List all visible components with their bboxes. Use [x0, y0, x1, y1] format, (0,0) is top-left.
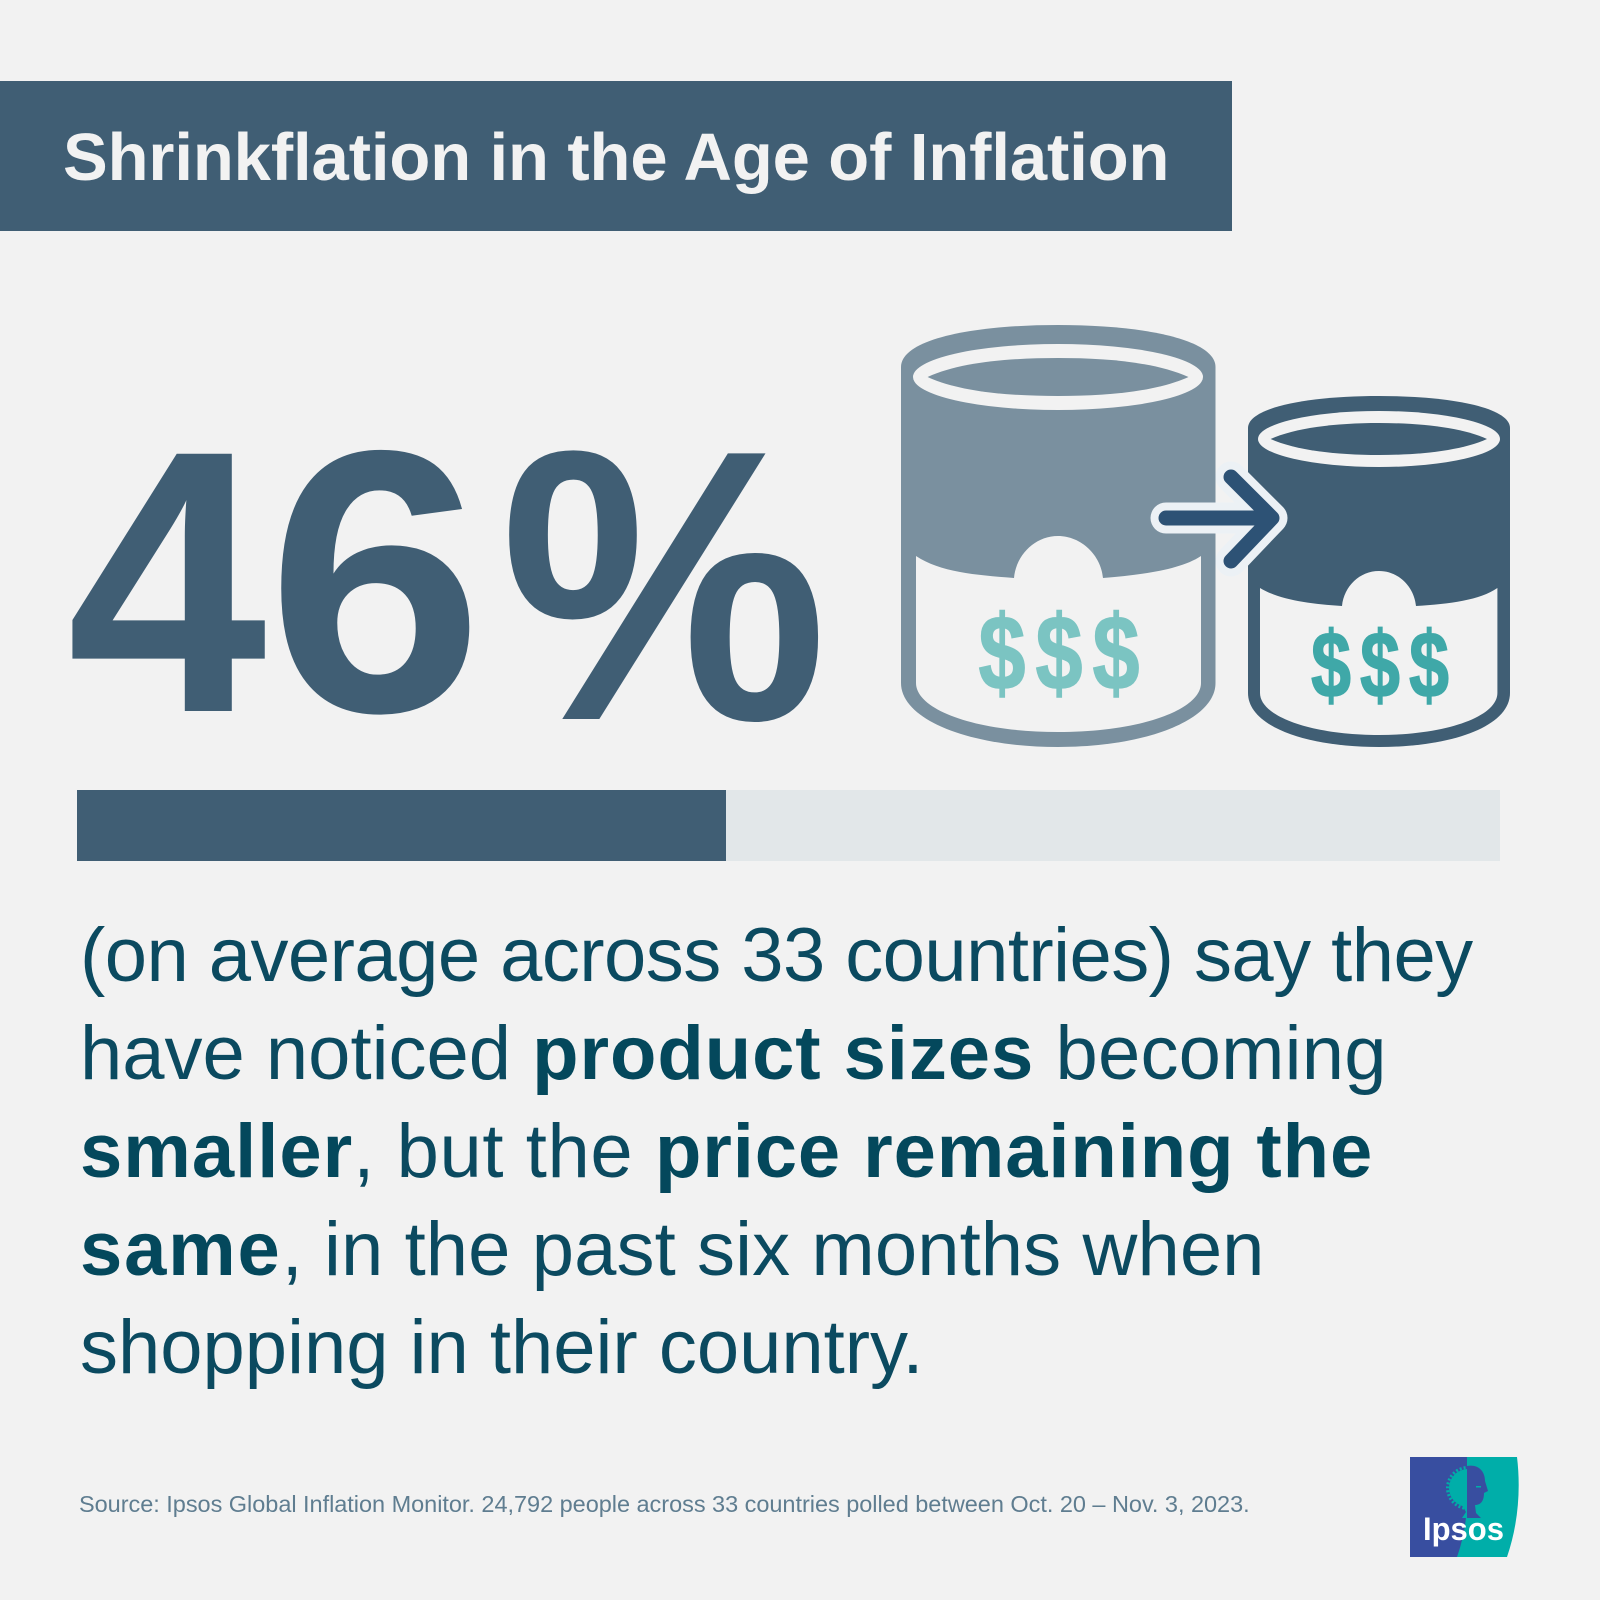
icon: small can: $	[1409, 612, 1449, 717]
body text	[80, 913, 1473, 1390]
icon: large can: $	[1036, 594, 1082, 712]
title banner	[0, 81, 1232, 231]
icon: large can: $	[978, 594, 1026, 712]
body text: (on average across 33 countries) say they	[80, 913, 1473, 998]
icon: small can: $	[1311, 612, 1351, 717]
icon: large can	[901, 325, 1216, 747]
title: Shrinkflation in the Age of Inflation	[63, 120, 1169, 195]
body text: shopping in their country.	[80, 1305, 924, 1390]
progress bar	[76, 790, 1500, 861]
icon: shrinking cans with arrow	[901, 325, 1510, 747]
logo: Ipsos	[1410, 1457, 1519, 1557]
icon: small can	[1248, 396, 1510, 747]
icon: small can: $	[1360, 612, 1400, 717]
percent sign: %	[500, 370, 828, 801]
big statistic	[67, 370, 828, 801]
icon: arrow	[1166, 477, 1272, 561]
body text: same, in the past six months when	[80, 1207, 1265, 1292]
progress bar fill: 46%	[76, 790, 726, 861]
digit 4: 4	[67, 373, 267, 791]
icon: large can: $	[1092, 594, 1140, 712]
body text: have noticed product sizes becoming	[80, 1011, 1387, 1096]
logo: Ipsos: Ipsos	[1423, 1511, 1504, 1547]
digit 6: 6	[266, 373, 483, 791]
body text: smaller, but the price remaining the	[80, 1109, 1373, 1194]
source note: Source: Ipsos Global Inflation Monitor. 24,792 people across 33 countries polled between Oct. 20 – Nov. 3, 2023.	[79, 1491, 1250, 1517]
